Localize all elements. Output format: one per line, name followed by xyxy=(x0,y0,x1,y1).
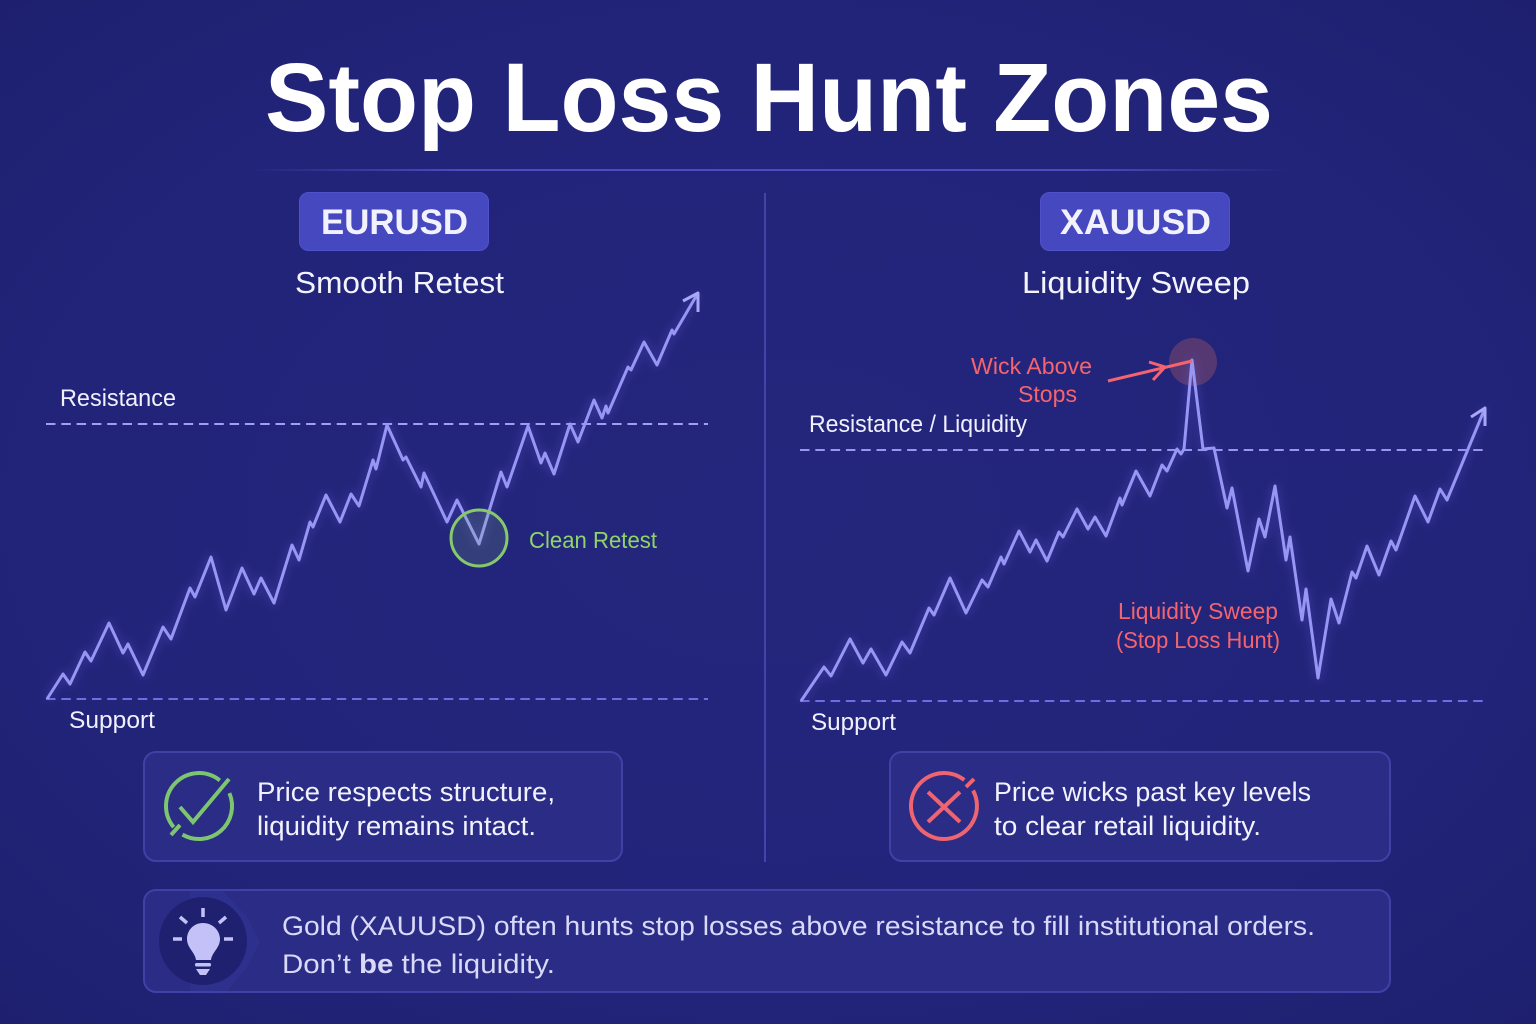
marker: clean retest xyxy=(451,510,658,566)
subtitle: Smooth Retest: Smooth Retest xyxy=(295,265,504,300)
label: liquidity sweep xyxy=(1116,598,1280,653)
text: takeaway: Gold (XAUUSD) often hunts stop losses above resistance to fill institutional orders. xyxy=(282,911,1315,941)
text: note xyxy=(257,777,555,841)
label: wick above stops: Wick Above xyxy=(971,353,1092,379)
label: wick above stops xyxy=(971,353,1092,407)
text: note: liquidity remains intact. xyxy=(257,811,536,841)
text: takeaway: Don’t be the liquidity. xyxy=(282,949,555,979)
text: takeaway xyxy=(282,911,1315,979)
text: note: Price wicks past key levels xyxy=(994,777,1311,807)
label: wick above stops: Stops xyxy=(1018,381,1077,407)
text: note: Price respects structure, xyxy=(257,777,555,807)
badge: XAUUSD xyxy=(1040,192,1230,250)
icon: cross mark xyxy=(911,773,977,839)
panel: EURUSD note xyxy=(144,752,622,861)
badge: EURUSD xyxy=(300,192,488,250)
support level: Support xyxy=(69,707,155,734)
highlight: wick top xyxy=(1169,338,1217,386)
text: note: to clear retail liquidity. xyxy=(994,811,1261,841)
price line xyxy=(801,360,1485,701)
icon: light bulb xyxy=(159,897,247,985)
resistance level: Resistance / Liquidity xyxy=(809,411,1027,438)
label: liquidity sweep: Liquidity Sweep xyxy=(1118,598,1278,624)
resistance level: Resistance xyxy=(60,385,176,412)
badge: XAUUSD: XAUUSD xyxy=(1060,203,1211,242)
support level: Support xyxy=(811,709,896,736)
badge: EURUSD: EURUSD xyxy=(321,203,468,242)
subtitle: Liquidity Sweep: Liquidity Sweep xyxy=(1022,265,1250,300)
panel: EURUSD chart xyxy=(46,192,708,734)
label: liquidity sweep: (Stop Loss Hunt) xyxy=(1116,627,1280,653)
panel: XAUUSD chart xyxy=(800,192,1488,736)
icon: check mark xyxy=(166,773,232,839)
title: Stop Loss Hunt Zones xyxy=(265,43,1273,152)
arrow: wick callout xyxy=(1108,361,1192,381)
price line xyxy=(47,293,698,699)
panel: XAUUSD note xyxy=(890,752,1390,861)
text: note xyxy=(994,777,1311,841)
panel: gold takeaway xyxy=(144,890,1390,992)
marker: clean retest: Clean Retest xyxy=(529,527,658,553)
